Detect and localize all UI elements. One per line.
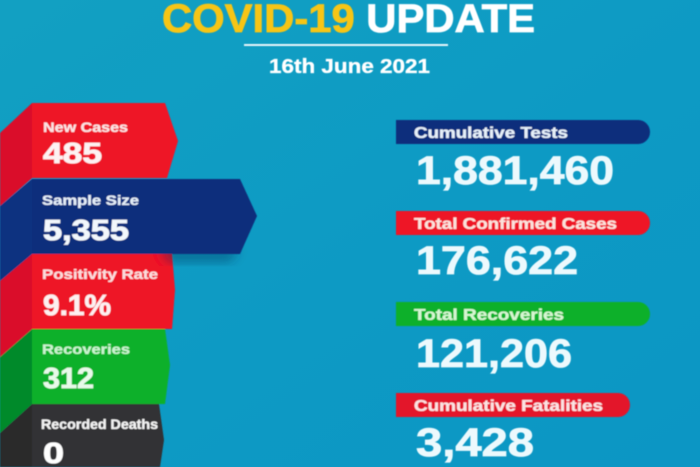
stat: total recoveries [396,302,650,376]
stat: total recoveries: 121,206 [416,332,572,376]
panel: positivity rate: Positivity Rate [42,267,159,282]
stat: cumulative fatalities: 3,428 [416,421,534,465]
stat: total confirmed cases: Total Confirmed Cases [414,216,617,233]
panel: sample size: 5,355 [43,215,129,247]
panel: cumulative statistics [396,120,650,465]
stat: total confirmed cases: 176,622 [416,239,578,283]
panel: daily statistics ribbon [0,103,257,467]
header [162,0,535,78]
panel: positivity rate [0,254,175,357]
stat: total recoveries: Total Recoveries [414,307,564,324]
panel: positivity rate: 9.1% [43,290,111,322]
stat: cumulative tests: 1,881,460 [416,149,614,193]
panel: sample size [0,179,257,281]
title underline [244,44,448,46]
panel: new cases [0,103,178,206]
panel: new cases: 485 [43,138,102,170]
panel: recoveries: Recoveries [42,342,130,357]
stat: cumulative fatalities: Cumulative Fatalities [414,398,603,415]
stat: cumulative fatalities [396,393,630,465]
date: 16th June 2021 [269,56,430,78]
panel: new cases: New Cases [43,120,128,135]
stat: cumulative tests [396,120,650,193]
shadow under sample size [160,250,240,262]
panel: sample size: Sample Size [42,193,140,208]
panel: recorded deaths: Recorded Deaths [41,417,158,432]
stat: total confirmed cases [396,211,650,283]
panel: recoveries [0,329,170,433]
panel: recorded deaths [0,404,164,467]
stat: cumulative tests: Cumulative Tests [414,125,568,142]
panel: recoveries: 312 [43,363,94,395]
